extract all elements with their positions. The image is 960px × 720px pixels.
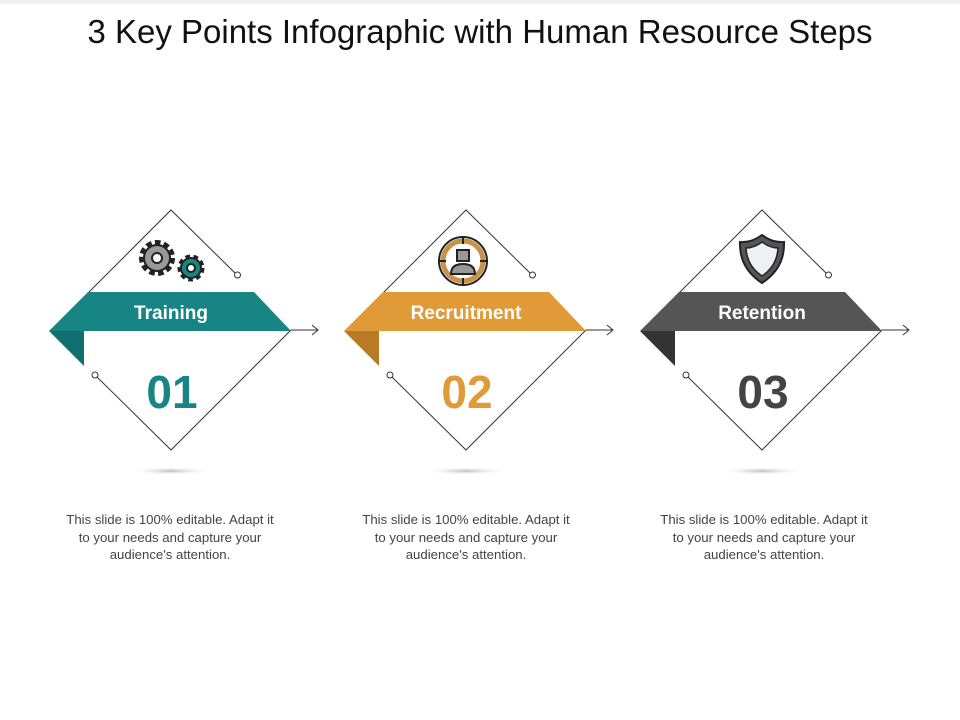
icon: gears (143, 244, 201, 278)
icon: shield (740, 235, 784, 283)
banner (640, 292, 882, 366)
panel: retention (640, 210, 909, 475)
panel: recruitment (344, 210, 613, 475)
diamond outline (88, 210, 318, 450)
text: recruitment description: This slide is 100% editable. Adapt it to your needs and capture your audience's attention. (362, 512, 570, 562)
text: retention description: This slide is 100% editable. Adapt it to your needs and capture your audience's attention. (660, 512, 868, 562)
banner (49, 292, 291, 366)
banner (344, 292, 586, 366)
text: training description: This slide is 100% editable. Adapt it to your needs and capture your audience's attention. (66, 512, 274, 562)
number: 02 (441, 366, 493, 418)
diamond outline (383, 210, 613, 450)
banner: Recruitment (411, 303, 522, 324)
banner: Retention (718, 303, 806, 324)
diamond outline (679, 210, 909, 450)
title: 3 Key Points Infographic with Human Resource Steps (87, 13, 873, 50)
number: 01 (146, 366, 198, 418)
panel: training (49, 210, 318, 475)
icon: target person (438, 236, 488, 286)
banner: Training (134, 303, 208, 324)
number: 03 (737, 366, 789, 418)
